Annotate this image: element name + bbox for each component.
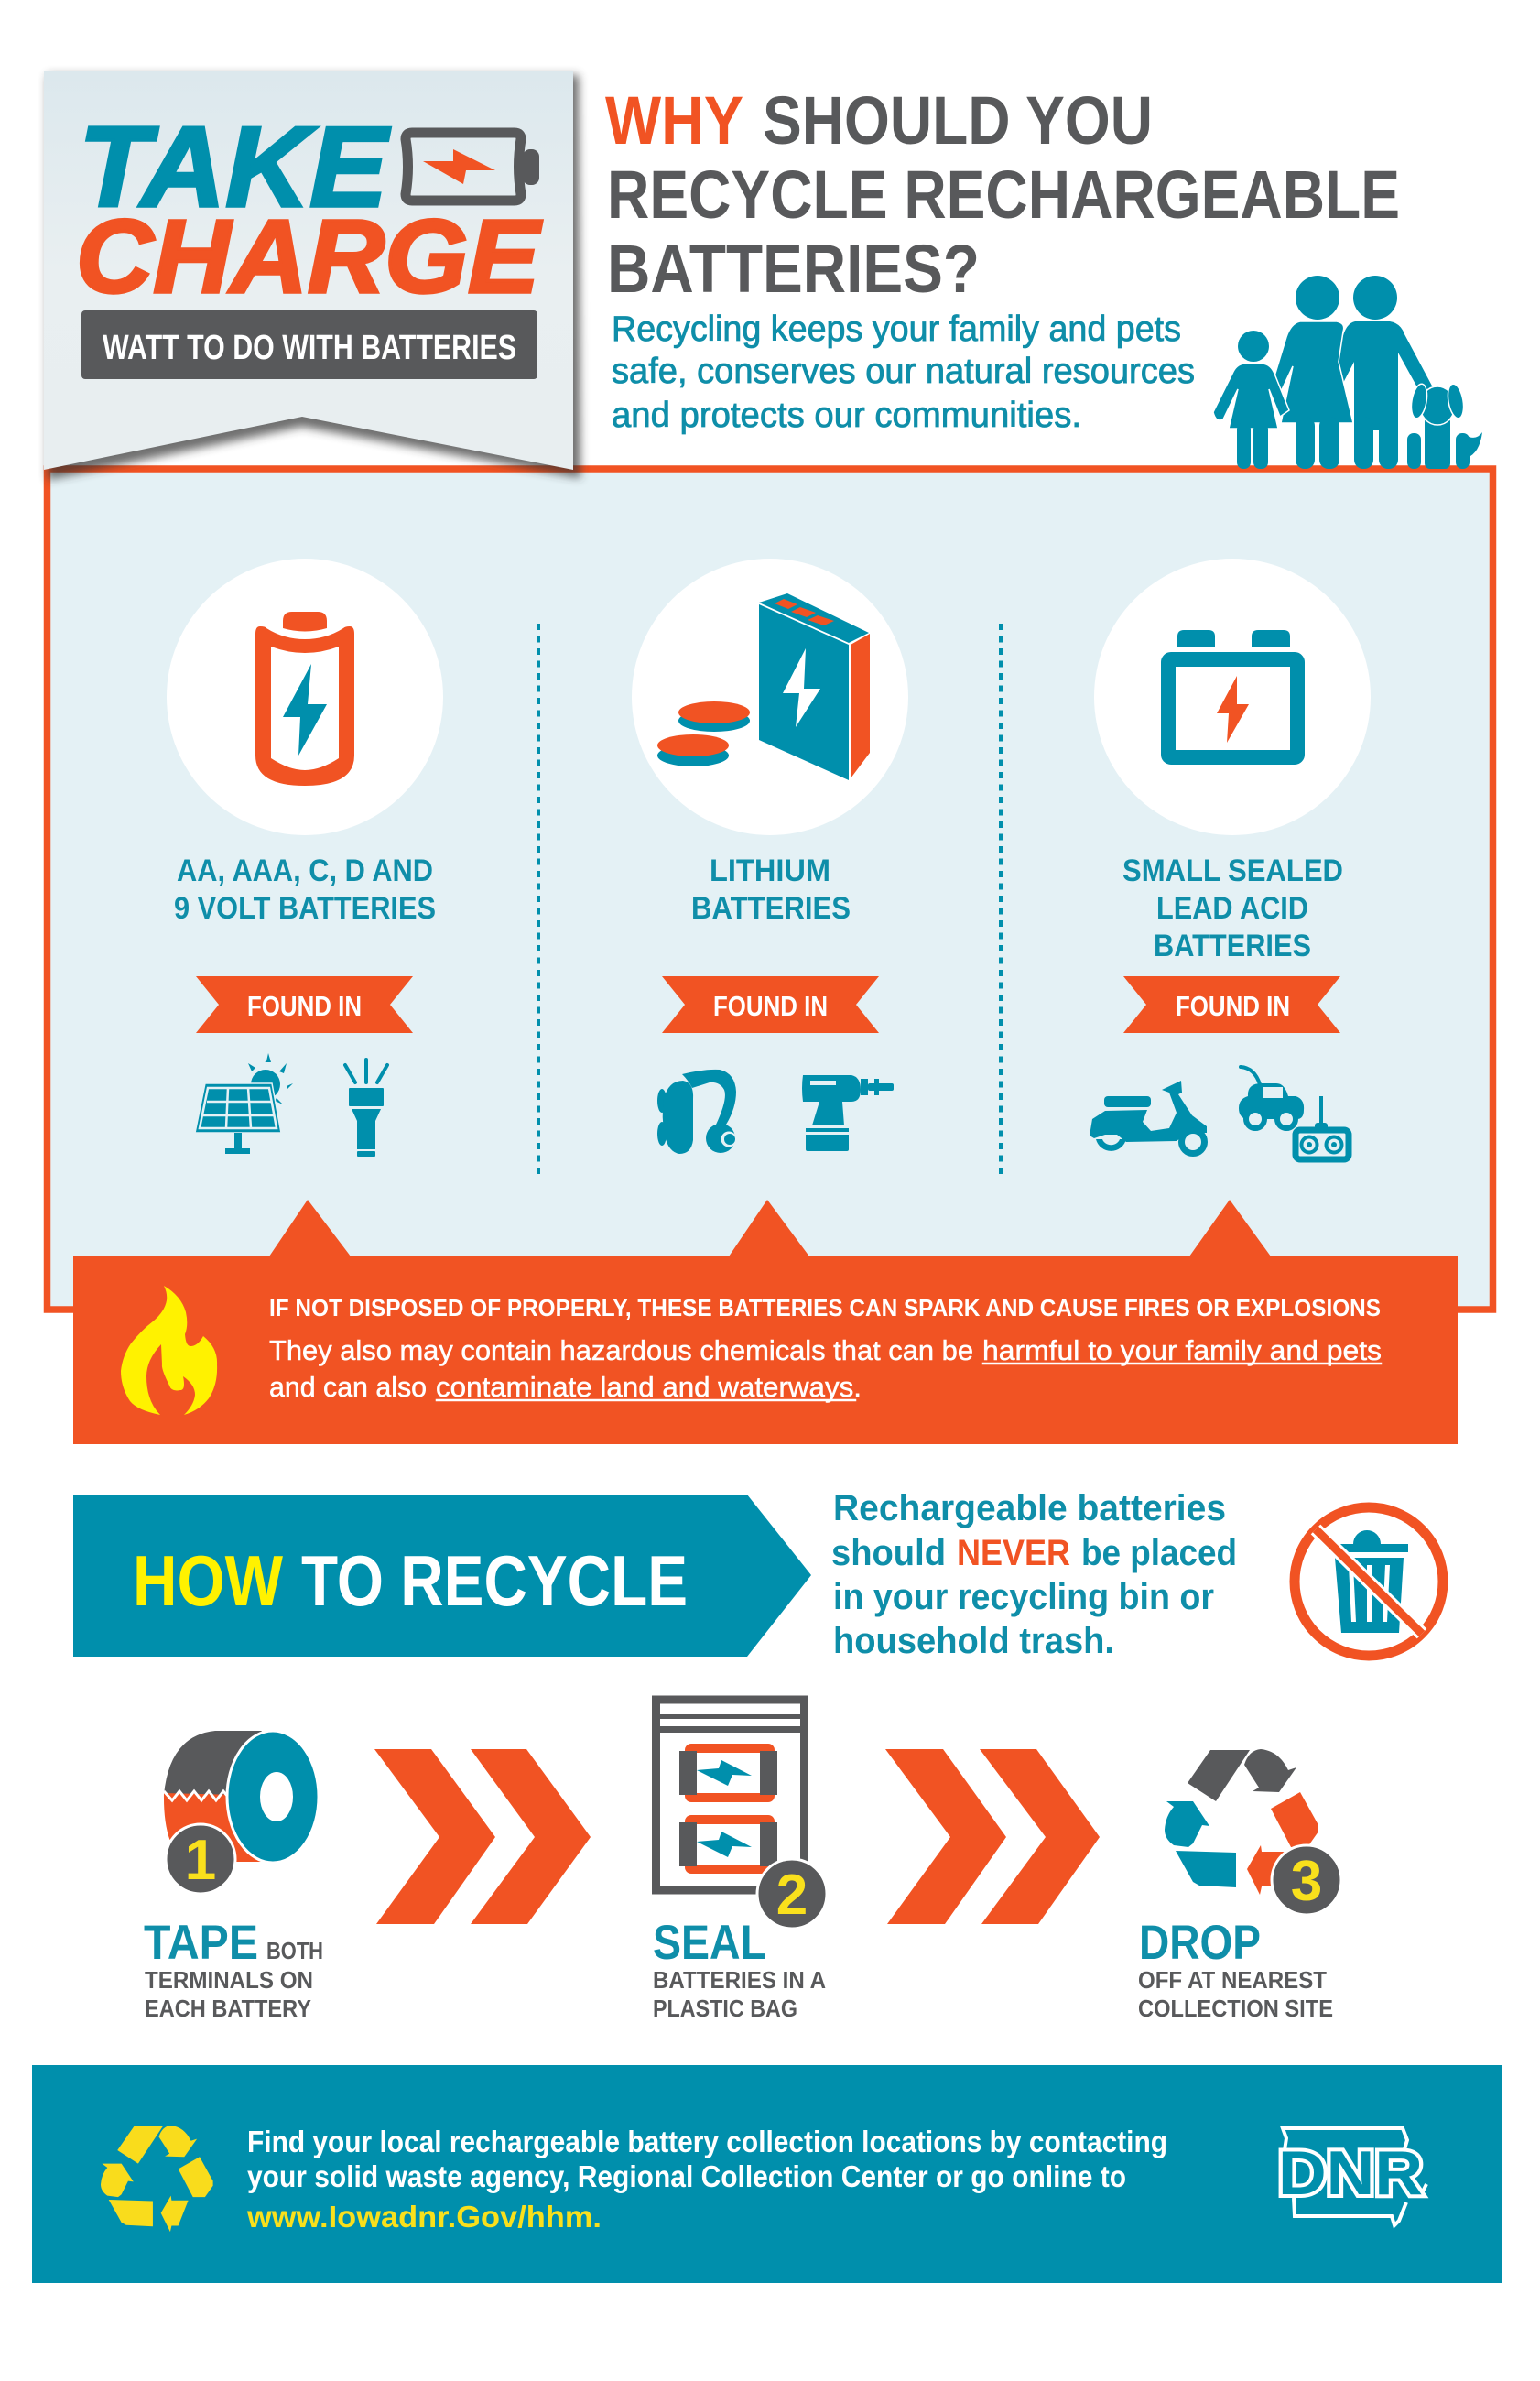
label: BATTERIES xyxy=(691,891,851,926)
label: COLLECTION SITE xyxy=(1138,1995,1333,2022)
how to recycle banner: HOW xyxy=(133,1540,283,1621)
footer text: Find your local rechargeable battery collection locations by contacting xyxy=(247,2125,1167,2158)
circle icon: lead acid battery xyxy=(1094,559,1371,835)
never text: household trash. xyxy=(833,1621,1114,1661)
word TAKE: TAKE xyxy=(79,104,390,231)
label: AA, AAA, C, D AND xyxy=(177,853,433,888)
icon: solar panel xyxy=(195,1053,293,1154)
label xyxy=(1122,853,1343,963)
logo: DNR: DNR xyxy=(1278,2138,1423,2208)
warning body: and can also xyxy=(269,1371,427,1403)
label: 9 VOLT BATTERIES xyxy=(174,891,436,926)
label: TERMINALS ON xyxy=(145,1966,313,1994)
circle icon: AA battery xyxy=(167,559,443,835)
icon: plastic bag xyxy=(652,1700,827,1929)
heading: WHY xyxy=(605,82,743,158)
icon: flashlight xyxy=(345,1060,387,1157)
intro text: safe, conserves our natural resources xyxy=(612,352,1195,391)
warning body xyxy=(269,1334,1382,1403)
footer text: www.Iowadnr.Gov/hhm. xyxy=(246,2200,602,2234)
heading: RECYCLE RECHARGEABLE xyxy=(607,157,1400,233)
label: BATTERIES xyxy=(1154,929,1311,963)
column 2: Lithium batteries xyxy=(632,559,908,1154)
found in ribbon xyxy=(196,976,413,1033)
found in ribbon xyxy=(662,976,879,1033)
found in ribbon: FOUND IN xyxy=(713,990,828,1022)
never text xyxy=(831,1488,1237,1661)
step 2: seal xyxy=(652,1700,827,2022)
label: LITHIUM xyxy=(710,853,830,888)
column 3: sealed lead acid xyxy=(1090,559,1371,1159)
label: DROP xyxy=(1139,1916,1261,1970)
label: LEAD ACID xyxy=(1156,891,1308,926)
label xyxy=(1138,1916,1333,2022)
intro text xyxy=(612,310,1195,435)
step 3: drop xyxy=(1138,1749,1341,2022)
tagline box xyxy=(81,310,537,379)
how to recycle banner: TO RECYCLE xyxy=(301,1540,688,1621)
warning body: They also may contain hazardous chemicals that can be xyxy=(269,1334,973,1366)
never text: Rechargeable batteries xyxy=(833,1488,1226,1528)
column 1: AA batteries xyxy=(167,559,443,1157)
tagline box: WATT TO DO WITH BATTERIES xyxy=(103,329,516,367)
label: TAPE xyxy=(144,1916,258,1970)
title ribbon xyxy=(44,71,580,480)
heading: BATTERIES? xyxy=(607,231,980,307)
icon: remote control xyxy=(1296,1096,1349,1159)
warning headline: IF NOT DISPOSED OF PROPERLY, THESE BATTERIES CAN SPARK AND CAUSE FIRES OR EXPLOSIONS xyxy=(269,1294,1381,1321)
icon: flame xyxy=(121,1286,217,1415)
label: EACH BATTERY xyxy=(145,1995,311,2022)
warning body: contaminate land and waterways. xyxy=(436,1371,862,1403)
label: BOTH xyxy=(266,1937,323,1964)
intro text: Recycling keeps your family and pets xyxy=(612,310,1181,349)
label: PLASTIC BAG xyxy=(653,1995,797,2022)
never text: be placed xyxy=(1081,1533,1237,1573)
icon: toy car xyxy=(1239,1067,1304,1128)
word CHARGE: CHARGE xyxy=(76,199,543,314)
label xyxy=(691,853,851,926)
label: SEAL xyxy=(653,1916,766,1970)
icon: scooter xyxy=(1090,1081,1207,1154)
how to recycle banner xyxy=(73,1495,811,1657)
footer band xyxy=(32,2065,1502,2283)
icon: family xyxy=(1213,276,1482,469)
icon: tape roll xyxy=(164,1731,319,1894)
icon: tape roll: 1 xyxy=(185,1829,216,1892)
found in ribbon xyxy=(1123,976,1340,1033)
label xyxy=(653,1916,826,2022)
divider lines xyxy=(538,624,1001,1175)
arrows: chevrons 1 xyxy=(374,1749,591,1924)
icon: recycle xyxy=(1165,1749,1341,1915)
icon: hearing aid xyxy=(657,1070,736,1154)
label: SMALL SEALED xyxy=(1122,853,1343,888)
icon: battery xyxy=(406,133,539,201)
found in ribbon: FOUND IN xyxy=(247,990,362,1022)
icon: recycle: 3 xyxy=(1291,1850,1322,1913)
label: OFF AT NEAREST xyxy=(1138,1966,1327,1994)
icon: drill xyxy=(802,1075,894,1151)
footer text xyxy=(246,2125,1167,2234)
heading xyxy=(605,82,1400,307)
warning body: harmful to your family and pets xyxy=(982,1334,1382,1366)
icon: plastic bag: 2 xyxy=(776,1864,808,1927)
arrows: chevrons 2 xyxy=(885,1749,1100,1924)
footer text: your solid waste agency, Regional Collection Center or go online to xyxy=(247,2159,1126,2193)
heading: SHOULD YOU xyxy=(763,82,1153,158)
icon: no trash xyxy=(1295,1507,1443,1656)
never text: NEVER xyxy=(957,1533,1070,1573)
label xyxy=(174,853,436,926)
circle icon: lithium batteries xyxy=(632,559,908,835)
never text: in your recycling bin or xyxy=(833,1577,1214,1617)
logo: DNR xyxy=(1278,2128,1426,2225)
never text: should xyxy=(831,1533,946,1573)
label: BATTERIES IN A xyxy=(653,1966,826,1994)
panel: battery types xyxy=(48,469,1492,1310)
icon: yellow recycle xyxy=(101,2126,213,2232)
warning banner xyxy=(73,1200,1458,1444)
intro text: and protects our communities. xyxy=(612,396,1081,435)
label xyxy=(144,1916,323,2022)
step 1: tape xyxy=(144,1731,323,2022)
found in ribbon: FOUND IN xyxy=(1176,990,1290,1022)
